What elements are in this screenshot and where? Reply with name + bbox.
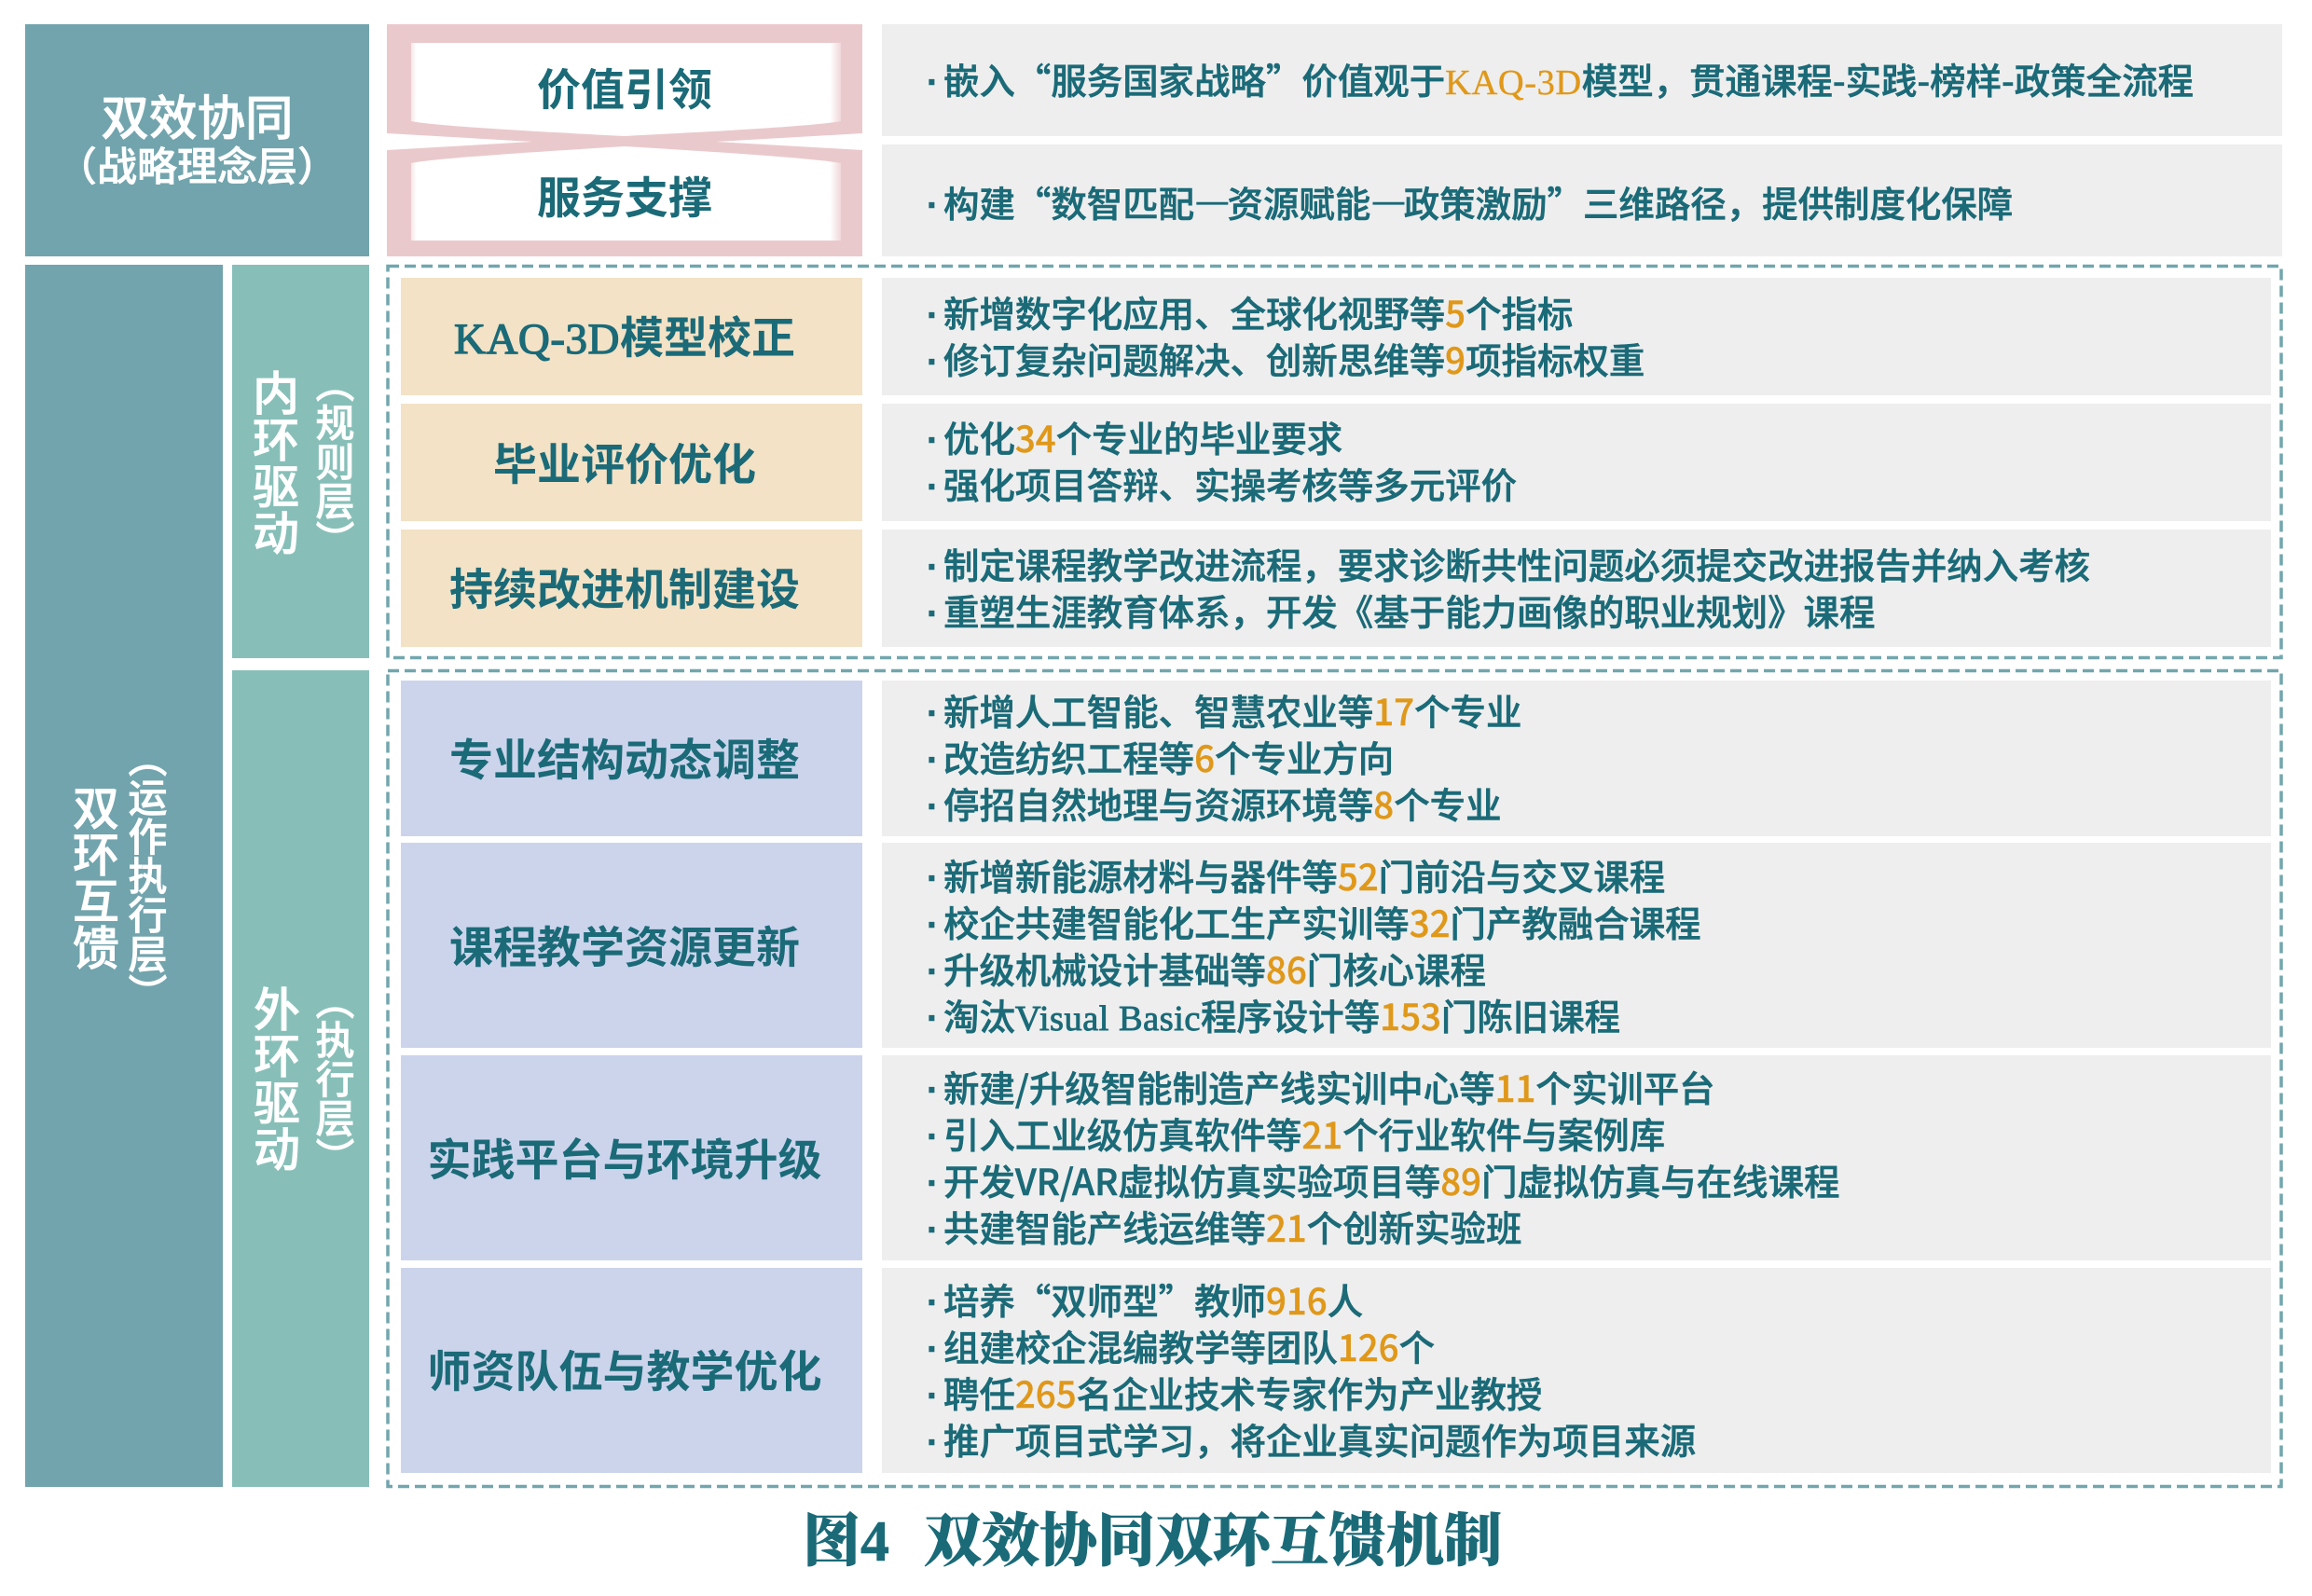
text: 价值引领 description: · — [927, 62, 939, 103]
panel: 双环互馈 operation layer — [25, 265, 223, 1487]
panel: 外环驱动 execution layer — [232, 670, 369, 1487]
text: 实践平台 line 3: 开发VR/AR虚拟仿真实验项目等89门虚拟仿真与在线课程 — [943, 1154, 1839, 1206]
text: 持续改进 line 1: · — [927, 547, 939, 587]
label: 运作执行层: （运作执行层） — [119, 738, 176, 1012]
label: 服务支撑: 服务支撑 — [537, 162, 712, 227]
text: 专业结构 line 2: 改造纺织工程等6个专业方向 — [943, 731, 1394, 783]
text: 实践平台 line 4: 共建智能产线运维等21个创新实验班 — [943, 1201, 1521, 1253]
label: 内环驱动: 内环驱动 — [242, 369, 310, 556]
text: KAQ-3D line 2: · — [927, 342, 939, 382]
label: 专业结构动态调整: 专业结构动态调整 — [449, 724, 800, 789]
text: 课程教学 line 3: 升级机械设计基础等86门核心课程 — [943, 942, 1486, 995]
text: 师资队伍 line 3: 聘任265名企业技术专家作为产业教授 — [943, 1367, 1542, 1419]
label: 持续改进机制建设: 持续改进机制建设 — [449, 554, 800, 618]
panel: 内环驱动 rule layer — [232, 265, 369, 658]
text: 课程教学 line 4: · — [927, 998, 939, 1039]
panel: 专业结构 description — [882, 681, 2271, 836]
panel: 双效协同 strategy layer — [25, 24, 369, 256]
text: 持续改进 line 2: 重塑生涯教育体系，开发《基于能力画像的职业规划》课程 — [943, 585, 1875, 637]
block: 课程教学资源更新 — [401, 843, 862, 1048]
text: 课程教学 line 2: · — [927, 905, 939, 945]
text: 实践平台 line 1: · — [927, 1070, 939, 1110]
panel: 价值引领 and 服务支撑 pink frame — [387, 24, 862, 256]
text: 实践平台 line 2: 引入工业级仿真软件等21个行业软件与案例库 — [943, 1108, 1665, 1160]
text: 专业结构 line 1: · — [927, 694, 939, 734]
label: 毕业评价优化: 毕业评价优化 — [493, 429, 756, 493]
text: 服务支撑 description: · — [927, 186, 939, 226]
label: 实践平台与环境升级: 实践平台与环境升级 — [427, 1124, 822, 1189]
label: 规则层: （规则层） — [307, 364, 364, 559]
panel: 课程教学 description — [882, 843, 2271, 1048]
text: KAQ-3D line 1: · — [927, 296, 939, 336]
block: 毕业评价优化 — [401, 404, 862, 521]
title: 图4 双效协同双环互馈机制 — [803, 1494, 1502, 1577]
text: 师资队伍 line 1: 培养“双师型”教师916人 — [943, 1273, 1363, 1326]
text: 课程教学 line 4: 淘汰Visual Basic程序设计等153门陈旧课程 — [943, 989, 1620, 1041]
text: 课程教学 line 1: 新增新能源材料与器件等52门前沿与交叉课程 — [943, 849, 1665, 901]
block: 专业结构动态调整 — [401, 681, 862, 836]
dashed frame: 外环 group — [386, 669, 2283, 1488]
text: 毕业评价 line 1: · — [927, 420, 939, 461]
text: 实践平台 line 4: · — [927, 1210, 939, 1250]
text: 实践平台 line 3: · — [927, 1163, 939, 1204]
text: KAQ-3D line 2: 修订复杂问题解决、创新思维等9项指标权重 — [943, 333, 1645, 385]
text: 价值引领 description: 嵌入“服务国家战略”价值观于KAQ-3D模型，贯通课程-实践-榜样-政策全流程 — [943, 53, 2194, 105]
dashed frame: 内环 group — [386, 265, 2283, 660]
panel: 毕业评价 description — [882, 404, 2271, 521]
label: 价值引领: 价值引领 — [537, 54, 712, 118]
text: 课程教学 line 3: · — [927, 952, 939, 992]
text: 课程教学 line 1: · — [927, 859, 939, 899]
block: KAQ-3D模型校正 — [401, 278, 862, 395]
label: 师资队伍与教学优化: 师资队伍与教学优化 — [427, 1336, 822, 1400]
text: KAQ-3D line 1: 新增数字化应用、全球化视野等5个指标 — [943, 286, 1573, 338]
text: 专业结构 line 1: 新增人工智能、智慧农业等17个专业 — [943, 684, 1521, 736]
heading: 双效协同: 双效协同 — [101, 79, 293, 149]
text: 实践平台 line 1: 新建/升级智能制造产线实训中心等11个实训平台 — [943, 1061, 1715, 1113]
label: 双环互馈: 双环互馈 — [62, 784, 130, 970]
text: 持续改进 line 1: 制定课程教学改进流程，要求诊断共性问题必须提交改进报告并纳入考核 — [943, 538, 2090, 590]
panel: 持续改进 description — [882, 530, 2271, 647]
text: 师资队伍 line 1: · — [927, 1283, 939, 1323]
text: 师资队伍 line 4: 推广项目式学习，将企业真实问题作为项目来源 — [943, 1413, 1696, 1465]
panel: 服务支撑 description — [882, 144, 2282, 256]
text: 师资队伍 line 3: · — [927, 1376, 939, 1416]
subheading: 战略理念层: （战略理念层） — [57, 135, 337, 193]
text: 专业结构 line 3: · — [927, 787, 939, 827]
text: 师资队伍 line 4: · — [927, 1423, 939, 1463]
text: 课程教学 line 2: 校企共建智能化工生产实训等32门产教融合课程 — [943, 896, 1701, 948]
label: 课程教学资源更新: 课程教学资源更新 — [449, 912, 800, 976]
text: 师资队伍 line 2: 组建校企混编教学等团队126个 — [943, 1320, 1435, 1372]
label: 执行层: （执行层） — [307, 981, 364, 1176]
text: 师资队伍 line 2: · — [927, 1329, 939, 1369]
panel: KAQ-3D description — [882, 278, 2271, 395]
panel: 实践平台 description — [882, 1055, 2271, 1260]
label: KAQ-3D模型校正: KAQ-3D模型校正 — [454, 302, 795, 366]
label: 外环驱动: 外环驱动 — [243, 985, 310, 1172]
text: 毕业评价 line 1: 优化34个专业的毕业要求 — [943, 411, 1342, 463]
block: 师资队伍与教学优化 — [401, 1268, 862, 1473]
text: 专业结构 line 2: · — [927, 740, 939, 780]
panel: 价值引领 description — [882, 24, 2282, 136]
text: 实践平台 line 2: · — [927, 1117, 939, 1157]
block: 持续改进机制建设 — [401, 530, 862, 647]
panel: 师资队伍 description — [882, 1268, 2271, 1473]
block: 实践平台与环境升级 — [401, 1055, 862, 1260]
text: 毕业评价 line 2: 强化项目答辩、实操考核等多元评价 — [943, 458, 1517, 510]
text: 持续改进 line 2: · — [927, 594, 939, 634]
text: 服务支撑 description: 构建“数智匹配—资源赋能—政策激励”三维路径，提供制度化保障 — [943, 176, 2013, 228]
text: 专业结构 line 3: 停招自然地理与资源环境等8个专业 — [943, 777, 1502, 830]
text: 毕业评价 line 2: · — [927, 467, 939, 507]
